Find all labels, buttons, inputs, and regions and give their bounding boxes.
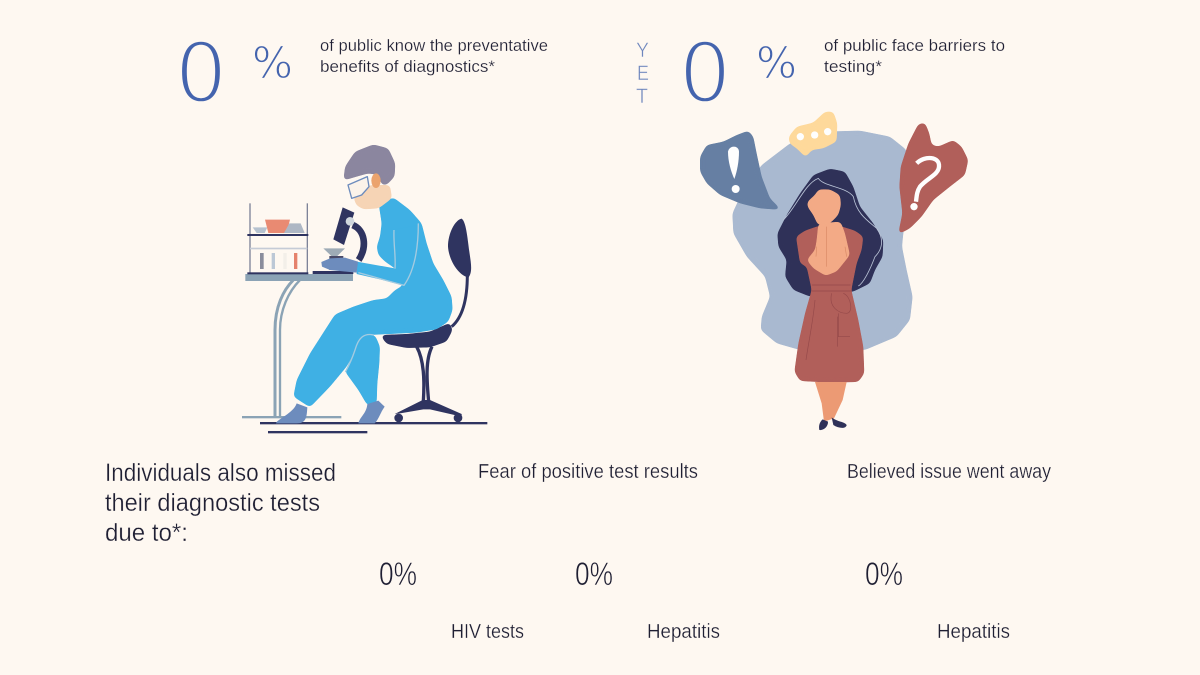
- bottom intro text: Individuals also missed: [105, 459, 336, 487]
- illustration: worried woman: [700, 112, 968, 430]
- gloved hand: [321, 258, 358, 273]
- description: preventative benefits: [320, 36, 548, 76]
- stat: hepatitis under fear: [575, 556, 720, 643]
- heading: believed issue went away: Believed issue went away: [847, 461, 1051, 483]
- sleeve highlight lines: [345, 223, 418, 372]
- description: preventative benefits: of public know the preventative: [320, 36, 548, 55]
- description: preventative benefits: benefits of diagnostics*: [320, 57, 495, 76]
- heading: fear of positive test results: Fear of positive test results: [478, 461, 698, 483]
- stat: hepatitis under believed issue went away: 0%: [865, 556, 903, 592]
- neck and face: [353, 185, 392, 209]
- chair: [380, 219, 471, 422]
- description: barriers to testing: [824, 36, 1005, 76]
- bottom intro text: [105, 459, 336, 547]
- rear leg: [345, 335, 380, 405]
- big number zero: 0: [175, 25, 227, 122]
- forearm lines: [816, 227, 847, 267]
- vertical word YET: Y: [636, 39, 649, 62]
- illustration: scientist at microscope: [242, 144, 487, 433]
- vertical word YET: [636, 39, 649, 108]
- stat: HIV tests: 0%: [379, 556, 417, 592]
- legs: [815, 382, 847, 422]
- description: barriers to testing: testing*: [824, 57, 882, 76]
- ellipsis speech bubble: [789, 112, 837, 157]
- face covered by hands: [807, 189, 841, 225]
- exclamation speech bubble: [700, 131, 782, 210]
- stat: HIV tests: HIV tests: [451, 621, 524, 643]
- vertical word YET: T: [636, 85, 648, 108]
- test tube rack: [247, 203, 308, 274]
- dress: [794, 226, 864, 383]
- ear: [371, 173, 381, 188]
- percent sign: %: [756, 38, 797, 89]
- hair: [343, 144, 395, 185]
- stat: hepatitis under fear: Hepatitis: [647, 621, 720, 643]
- body and front leg: [293, 197, 453, 407]
- stat: public know preventative benefits: [175, 25, 548, 122]
- floor lines: [242, 416, 487, 433]
- arms and hands: [807, 222, 850, 276]
- percent sign: %: [252, 38, 293, 89]
- shoes: [819, 417, 847, 430]
- stat: hepatitis under believed issue went away: [865, 556, 1010, 643]
- desk with legs: [245, 274, 353, 417]
- belt and folds: [806, 285, 851, 360]
- vertical word YET: E: [637, 62, 649, 85]
- stat: HIV tests: [379, 556, 524, 643]
- bottom intro text: their diagnostic tests: [105, 489, 320, 517]
- question speech bubble: [898, 123, 968, 235]
- arm: [357, 225, 418, 286]
- goggles: [348, 177, 369, 198]
- background blob: [732, 131, 913, 350]
- bottom intro text: due to*:: [105, 519, 188, 547]
- microscope: [313, 207, 364, 274]
- stat: public face barriers: [679, 25, 1005, 122]
- description: barriers to testing: of public face barriers to: [824, 36, 1005, 55]
- hair highlight strands: [783, 178, 882, 286]
- big number zero: 0: [679, 25, 731, 122]
- shoes: [276, 401, 385, 423]
- stat: hepatitis under believed issue went away: Hepatitis: [937, 621, 1010, 643]
- stat: hepatitis under fear: 0%: [575, 556, 613, 592]
- hair: [777, 169, 883, 297]
